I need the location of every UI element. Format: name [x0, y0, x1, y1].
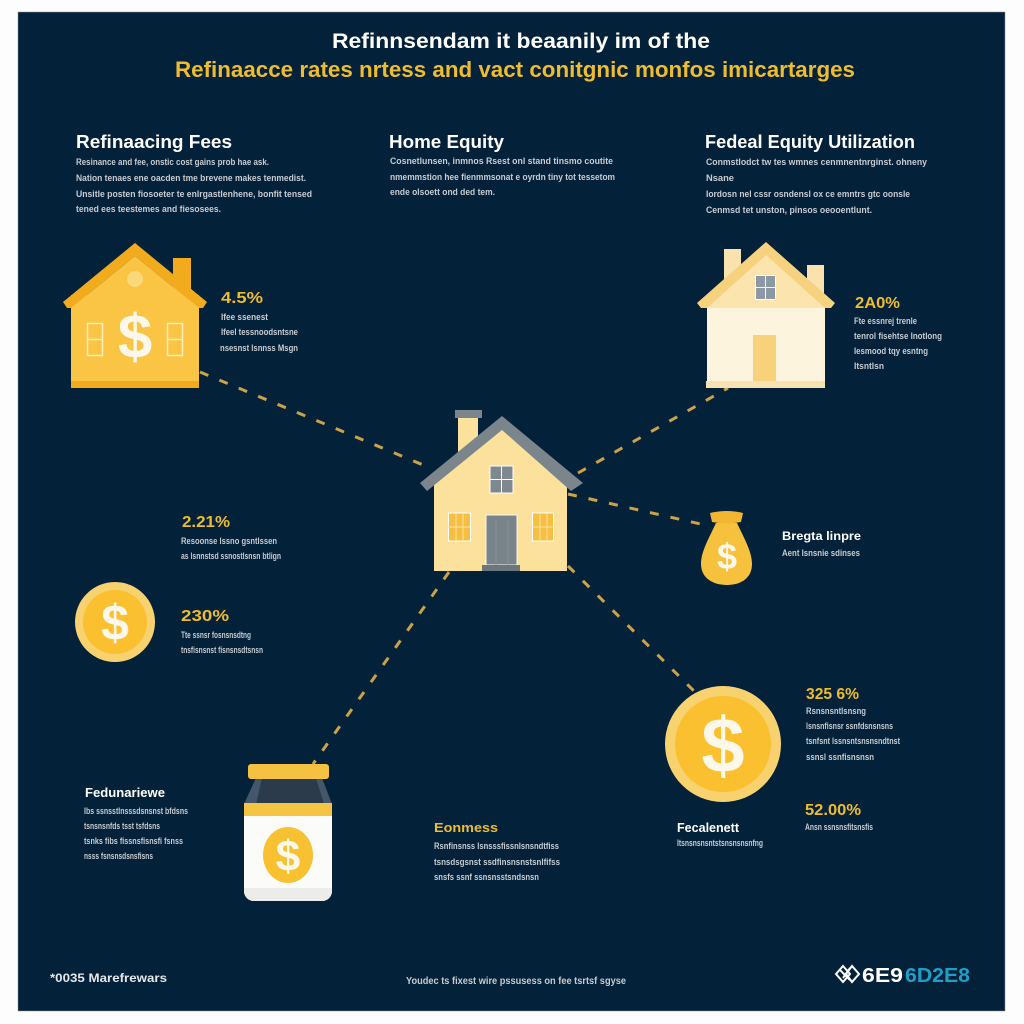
label: eonmess text: Rsnfinsnss Isnsssfissnlsnsndtfiss — [434, 841, 559, 851]
label: eonmess text: Eonmess — [434, 820, 498, 835]
stat: 52.00 percent — [805, 802, 873, 832]
icon: yellow house with dollar — [63, 243, 207, 388]
panel: home equity text: nmemmstion hee fienmmsonat e oyrdn tiny tot tessetom — [390, 172, 615, 182]
label: bag text: Aent Isnsnie sdinses — [782, 548, 860, 558]
footer: copyright: *0035 Marefrewars — [50, 973, 167, 985]
icon: large coin: $ — [701, 701, 745, 789]
stat: 230 percent: tnsfisnsnst fisnsnsdtsnsn — [181, 645, 263, 655]
icon: money bag — [701, 511, 752, 585]
stat: 2.40 percent: Iesmood tqy esntng — [854, 346, 928, 356]
panel: home equity text: Cosnetlunsen, inmnos Rsest onl stand tinsmo coutite — [390, 156, 613, 166]
panel: home equity text: ende olsoett ond ded tem. — [390, 187, 495, 197]
stat: 2.40 percent: 2A0% — [855, 295, 900, 312]
stat: 4.5 percent: nsesnst lsnnss Msgn — [220, 343, 298, 353]
panel: federal equity utilization text: Cenmsd tet unston, pinsos oeooentlunt. — [706, 205, 872, 215]
stat: 326 percent — [806, 686, 900, 762]
stat: 4.5 percent — [220, 290, 298, 353]
footer: logo — [836, 965, 970, 987]
label: fedunariewe text: nsss fsnsnsdsnsfisns — [84, 851, 153, 861]
label: fedunariewe text — [84, 785, 188, 861]
panel: federal equity utilization text: Nsane — [706, 173, 734, 183]
stat: 52.00 percent: Ansn ssnsnsfitsnsfis — [805, 822, 873, 832]
panel: federal equity utilization text: Iordosn nel cssr osndensl ox ce emntrs gtc oonsle — [706, 189, 910, 199]
stat: 4.5 percent: Ifee ssenest — [221, 312, 268, 322]
label: fecalenett text: Itsnsnsnsntstsnsnsnsnfng — [677, 838, 763, 848]
icon: jar with dollar — [244, 764, 332, 901]
stat: 326 percent: 325 6% — [806, 686, 859, 703]
label: eonmess text: snsfs ssnf ssnsnsstsndsnsn — [434, 872, 539, 882]
stat: 2.21 percent — [181, 514, 281, 561]
icon: large coin — [665, 686, 781, 802]
stat: 230 percent: 230% — [181, 608, 229, 625]
label: eonmess text: tsnsdsgsnst ssdfinsnsnstsnlfifss — [434, 857, 560, 867]
title: Refinnsendam it beaanily im of the — [332, 30, 710, 53]
label: fecalenett text — [677, 820, 763, 848]
icon: small coin — [75, 582, 155, 662]
label: eonmess text — [434, 820, 560, 882]
stat: 2.21 percent: Resoonse lssno gsntlssen — [181, 536, 277, 546]
icon: small coin: $ — [101, 595, 129, 651]
stat: 2.40 percent: Fte essnrej trenle — [854, 316, 917, 326]
icon: money bag: $ — [717, 536, 737, 577]
stat: 326 percent: ssnsl ssnfisnsnsn — [806, 752, 874, 762]
panel: refinancing fees text: Refinaacing Fees — [76, 132, 232, 152]
stat: 326 percent: lsnsnfisnsr ssnfdsnsnsns — [806, 721, 893, 731]
panel: refinancing fees text — [76, 132, 312, 214]
label: fedunariewe text: Ibs ssnsstlnsssdsnsnst bfdsns — [84, 806, 188, 816]
stat: 2.40 percent: Itsntlsn — [854, 361, 884, 371]
icon: central house — [420, 410, 583, 571]
label: fedunariewe text: tsnsnsnfds tsst tsfdsns — [84, 821, 160, 831]
title — [175, 30, 855, 82]
panel: federal equity utilization text: Conmstlodct tw tes wmnes cenmnentnrginst. ohneny — [706, 157, 927, 167]
title: Refinaacce rates nrtess and vact conitgnic monfos imicartarges — [175, 57, 855, 82]
connector: dashed lines — [200, 372, 728, 764]
stat: 326 percent: tsnfsnt lssnsntsnsnsndtnst — [806, 736, 900, 746]
panel: refinancing fees text: tened ees teestemes and fiesosees. — [76, 204, 221, 214]
panel: federal equity utilization text — [705, 132, 927, 215]
label: fecalenett text: Fecalenett — [677, 820, 740, 835]
stat: 2.21 percent: 2.21% — [182, 514, 230, 531]
panel: federal equity utilization text: Fedeal Equity Utilization — [705, 132, 915, 152]
icon: yellow house with dollar: $ — [118, 303, 152, 372]
panel: refinancing fees text: Resinance and fee, onstic cost gains prob hae ask. — [76, 157, 269, 167]
icon: cream house — [697, 242, 835, 388]
stat: 4.5 percent: 4.5% — [221, 290, 263, 307]
stat: 230 percent — [181, 608, 263, 655]
panel: home equity text: Home Equity — [389, 132, 504, 152]
stat: 2.40 percent: tenrol fisehtse Inotlong — [854, 331, 942, 341]
label: fedunariewe text: Fedunariewe — [85, 785, 165, 800]
footer: note: Youdec ts fixest wire pssusess on fee tsrtsf sgyse — [406, 976, 626, 987]
stat: 230 percent: Tte ssnsr fosnsnsdtng — [181, 630, 251, 640]
panel: refinancing fees text: Unsitle posten fiosoeter te enlrgastlenhene, bonfit tensed — [76, 189, 312, 199]
footer: logo: 6E9 — [862, 965, 903, 987]
label: bag text — [782, 529, 861, 558]
stat: 326 percent: Rsnsnsntlsnsng — [806, 706, 866, 716]
label: fedunariewe text: tsnks fibs fissnsfisnsfi fsnss — [84, 836, 183, 846]
stat: 52.00 percent: 52.00% — [805, 802, 861, 819]
footer: logo: 6D2E8 — [905, 965, 970, 987]
stat: 2.40 percent — [854, 295, 942, 371]
icon: jar with dollar: $ — [276, 832, 300, 881]
panel: refinancing fees text: Nation tenaes ene oacden tme brevene makes tenmedist. — [76, 173, 306, 183]
stat: 4.5 percent: Ifeel tessnoodsntsne — [221, 327, 298, 337]
panel: home equity text — [389, 132, 615, 197]
label: bag text: Bregta linpre — [782, 529, 861, 543]
stat: 2.21 percent: as lsnnstsd ssnostlsnsn btlign — [181, 551, 281, 561]
